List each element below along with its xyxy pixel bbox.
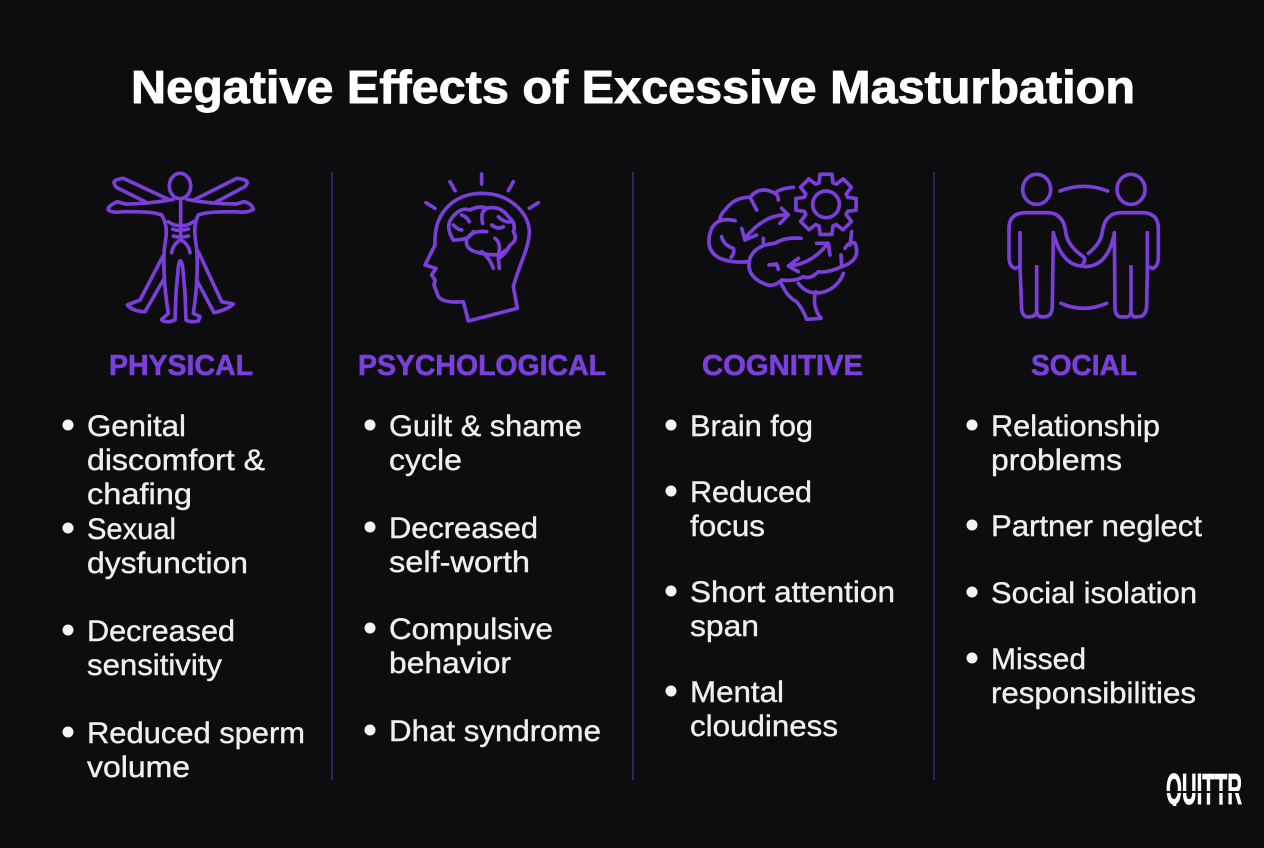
list: psychological effects: Dhat syndrome: [389, 715, 601, 748]
list: physical effects: chafing: [87, 478, 192, 511]
list: psychological effects: self-worth: [389, 546, 530, 579]
list: psychological effects: Decreased: [389, 512, 538, 545]
heading: social: SOCIAL: [1031, 350, 1137, 382]
panel: physical: [62, 173, 305, 784]
heading: physical: PHYSICAL: [109, 350, 253, 382]
list: physical effects: dysfunction: [87, 547, 248, 580]
list: cognitive effects: span: [690, 610, 759, 643]
list: physical effects: Decreased: [87, 615, 235, 648]
list: social effects: Missed: [991, 643, 1086, 676]
panel: social: [966, 174, 1203, 710]
icon: brain with gear: [709, 174, 857, 319]
list: cognitive effects: [666, 410, 895, 743]
list: cognitive effects: cloudiness: [690, 710, 838, 743]
list: cognitive effects: Short attention: [690, 576, 895, 609]
list: social effects: Relationship: [991, 410, 1160, 443]
list: social effects: [966, 410, 1203, 710]
list: cognitive effects: Mental: [690, 676, 784, 709]
icon: head with brain: [425, 174, 538, 321]
list: physical effects: sensitivity: [87, 649, 222, 682]
icon: two people shaking hands: [1009, 174, 1158, 317]
list: physical effects: discomfort &: [87, 444, 265, 477]
heading: psychological: PSYCHOLOGICAL: [358, 350, 606, 382]
list: psychological effects: behavior: [389, 647, 511, 680]
list: physical effects: volume: [87, 751, 190, 784]
list: physical effects: Reduced sperm: [87, 717, 305, 750]
list: cognitive effects: focus: [690, 510, 765, 543]
panel: psychological: [358, 174, 606, 748]
list: social effects: responsibilities: [991, 677, 1196, 710]
list: psychological effects: [364, 410, 601, 748]
title: Negative Effects of Excessive Masturbation: [131, 61, 1135, 113]
list: cognitive effects: Brain fog: [690, 410, 813, 443]
panel: cognitive: [666, 174, 895, 743]
list: social effects: Social isolation: [991, 577, 1197, 610]
list: social effects: Partner neglect: [991, 510, 1203, 543]
list: psychological effects: Compulsive: [389, 613, 553, 646]
heading: cognitive: COGNITIVE: [702, 350, 863, 382]
icon: human body: [108, 173, 253, 322]
list: physical effects: Genital: [87, 410, 186, 443]
list: cognitive effects: Reduced: [690, 476, 812, 509]
list: physical effects: Sexual: [87, 513, 176, 546]
list: psychological effects: Guilt & shame: [389, 410, 582, 443]
list: physical effects: [62, 410, 305, 784]
list: psychological effects: cycle: [389, 444, 462, 477]
list: social effects: problems: [991, 444, 1122, 477]
